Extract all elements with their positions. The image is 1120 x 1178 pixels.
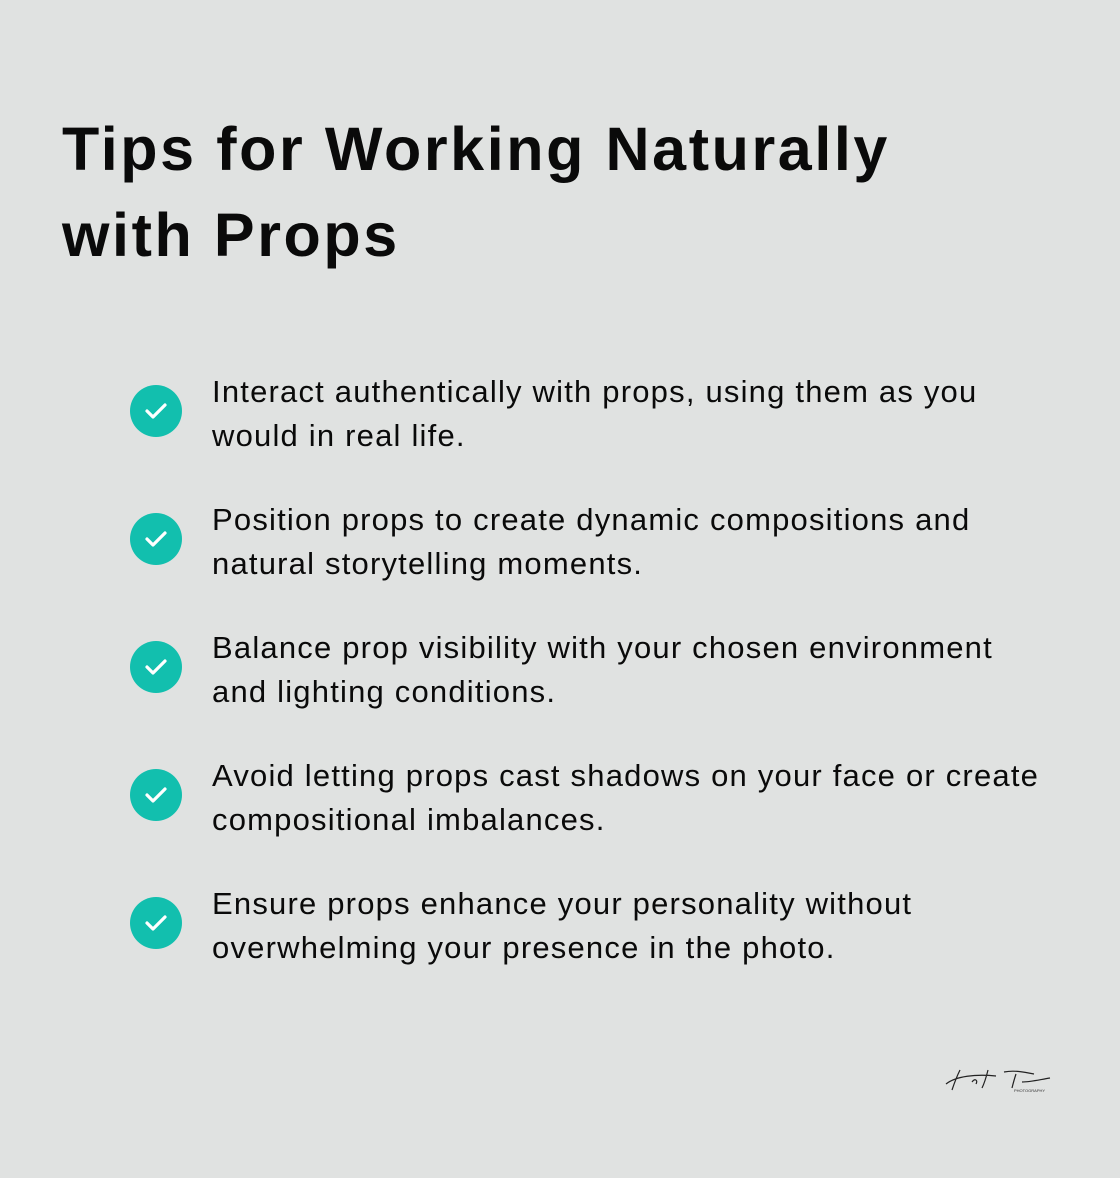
text xyxy=(212,758,1039,837)
signature logo: PHOTOGRAPHY xyxy=(1014,1088,1045,1093)
text: overwhelming your presence in the photo. xyxy=(212,930,836,965)
item 2 xyxy=(130,502,970,581)
text: Ensure props enhance your personality without xyxy=(212,886,912,921)
text xyxy=(212,374,977,453)
text xyxy=(212,886,912,965)
icon: check xyxy=(130,641,182,693)
text: Interact authentically with props, using them as you xyxy=(212,374,977,409)
text: Position props to create dynamic compositions and xyxy=(212,502,970,537)
title xyxy=(62,115,890,269)
text: would in real life. xyxy=(212,418,466,453)
text: Avoid letting props cast shadows on your face or create xyxy=(212,758,1039,793)
title: with Props xyxy=(62,201,400,269)
title: Tips for Working Naturally xyxy=(62,115,890,183)
text xyxy=(212,630,993,709)
item 4 xyxy=(130,758,1039,837)
icon: check xyxy=(130,769,182,821)
signature logo xyxy=(946,1070,1050,1093)
item 3 xyxy=(130,630,993,709)
icon: check xyxy=(130,513,182,565)
icon: check xyxy=(130,385,182,437)
text xyxy=(212,502,970,581)
text: and lighting conditions. xyxy=(212,674,556,709)
item 1 xyxy=(130,374,977,453)
item 5 xyxy=(130,886,912,965)
text: compositional imbalances. xyxy=(212,802,606,837)
text: Balance prop visibility with your chosen environment xyxy=(212,630,993,665)
text: natural storytelling moments. xyxy=(212,546,643,581)
icon: check xyxy=(130,897,182,949)
